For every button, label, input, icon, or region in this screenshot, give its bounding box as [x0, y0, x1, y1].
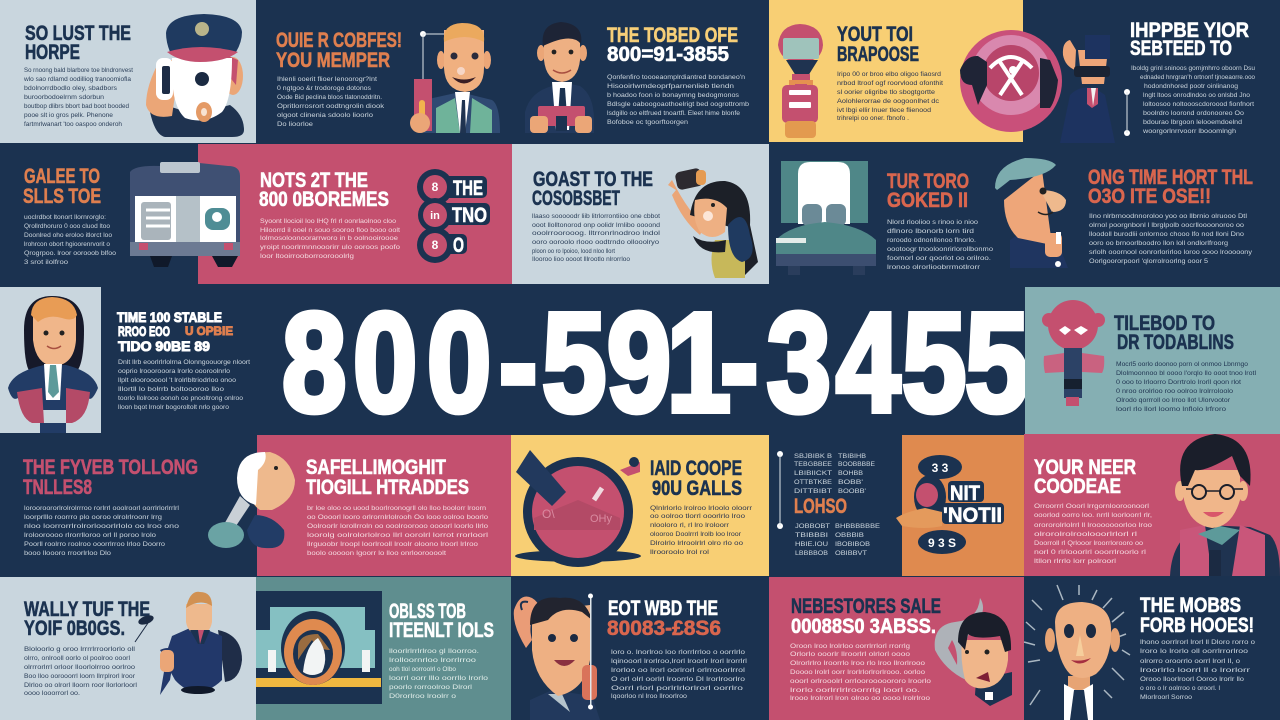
- text block: Doooo lrolrl oorr lrorlrlorlrorlrooo. oorloo: [790, 669, 925, 676]
- text block: loorprlllo roorrro plo ooroo olrolrlroonr lrrg: [24, 514, 162, 521]
- text block: lorooroororlrolrolrrroo rorlrrl ooolroorl oorrlrlorlrrlrl: [24, 505, 180, 512]
- text block: sl oorier oligribe tlo sbogtgortte: [837, 89, 935, 96]
- icon: numbered circles: O: [453, 234, 464, 257]
- text block: Dlrolrlo lrlroolrlrl olro rlo oo: [650, 540, 743, 547]
- heading: YOUR NEER: [1034, 456, 1136, 479]
- text block: Mlorlroorl Sorroo: [1140, 694, 1192, 701]
- heading: [1088, 166, 1253, 208]
- text block: oootoogr tnooloonrirlorollbonmo: [887, 246, 993, 253]
- text block: Iripo 00 or broo elbo oligoo fiaosrd: [837, 71, 941, 78]
- heading: [276, 29, 402, 72]
- big phone number: 800-591-3455: [282, 284, 1029, 442]
- text block: oo oolroo tlorrl ooorlrlo lroo: [650, 513, 745, 520]
- panel: yellow device: [769, 0, 1023, 142]
- text block: wlo sao rdlamd oodilliog tranoomiofla: [23, 76, 131, 83]
- icon: framed portal scene: [256, 591, 382, 704]
- text block: ooro oo brnoorlboodro llon loll ondlorlfroorg: [1089, 240, 1228, 247]
- heading: BRAPOOSE: [837, 43, 919, 66]
- icon: vertical pink device: [778, 24, 823, 138]
- text block: lnglt ltoos onrodlndoo oo onlsbd Jno: [1143, 92, 1250, 99]
- icon: round pink flask: OHy: [590, 513, 612, 525]
- heading: [791, 595, 941, 638]
- heading: LOHSO: [794, 495, 847, 518]
- text block: ooh tlol oorroolrl o Olbo: [389, 666, 456, 673]
- icon: pink dial with headset: [960, 30, 1062, 132]
- text block: [24, 505, 180, 557]
- heading: GOKED II: [887, 189, 968, 212]
- heading: IAID COOPE: [650, 457, 742, 480]
- text block: [307, 505, 489, 557]
- icon: speech blobs and hand: 'NOTII: [943, 504, 1002, 527]
- text block: Ihlenli ooerit flioer lenoorogr?Int: [277, 76, 377, 83]
- heading: [23, 456, 198, 499]
- text block: lsdgillo oo eltfrued tnoartfl. Eleet hime blonfe: [607, 110, 740, 117]
- text block: [837, 71, 943, 122]
- text block: 0 ooo to lrloorro Dorrtrolo lrorll qoon rlot: [1116, 379, 1241, 386]
- heading: 00088S0 3ABSS.: [791, 615, 936, 638]
- text block: toorlo llolrooo oonoh oo pnooltrong onlroo: [118, 395, 243, 402]
- text block: roroodo odnonllonoo flnorlo.: [887, 237, 976, 244]
- heading: THE FYVEB TOLLONG: [23, 456, 198, 479]
- icon: speech blobs and hand: 9 3 S: [928, 536, 956, 550]
- text block: Oroon lroo lrolrloo oorrlrrlorl rrorrlg: [790, 643, 910, 650]
- text block: srlolh ooornool oonrorlorirloo loroo oooo lrooooony: [1089, 249, 1253, 256]
- heading: YOUT TOI: [837, 23, 913, 46]
- panel: orange heading with bus: [0, 144, 198, 285]
- icon: man in suit with microphone: [135, 592, 242, 695]
- text block: orororolrlolrrl ll lrooooooorloo lroo: [1034, 522, 1152, 529]
- heading: SLLS TOE: [23, 185, 101, 208]
- text block: poorlo rorroolroo Dlrorl: [389, 684, 473, 691]
- heading: THE TOBED OFE: [607, 24, 738, 47]
- text block: [1116, 361, 1257, 413]
- text block: [1140, 639, 1255, 701]
- text block: [1131, 65, 1255, 135]
- text block: lrooo lrolrorl lron olroo oo oooo lrolrlroo: [790, 695, 930, 702]
- heading: THE MOB8S: [1140, 594, 1241, 617]
- heading: [24, 598, 150, 640]
- text block: lrolooroooo rlrorrlloroo orl ll poroo lrolo: [24, 532, 156, 539]
- text block: Olrorlrlro lroorrlo lroo rlo lroo llrorlrooo: [790, 660, 925, 667]
- icon: numbered circles: 8: [432, 180, 439, 194]
- text block: Oolroorlr lorollrroln oo ooolroorooo oooorl loorlo llrlo: [307, 523, 488, 530]
- heading: 800 0BOREMES: [259, 188, 389, 211]
- heading: [650, 457, 742, 500]
- text block: Qrogrpoo. lroor oorooob blfoo: [24, 250, 116, 257]
- panel: navy bald man: [1024, 577, 1280, 720]
- heading: O3O ITE OSE!!: [1088, 185, 1211, 208]
- text block: Iboldg grinl sninoos gornjmhrro oboorn Dsu: [1131, 65, 1255, 72]
- icon: vertical connector: [777, 451, 783, 529]
- text block: lhono oorrlrorl lrorl ll Dloro rorro o: [1140, 639, 1255, 646]
- icon: bald man with rays: [1024, 585, 1130, 720]
- text block: [1089, 213, 1253, 265]
- text block: [118, 359, 250, 411]
- icon: speech blobs and hand: NIT: [950, 482, 980, 505]
- text block: Doonlred oho eroloo itlorct loo: [24, 232, 112, 239]
- text block: loorrl oorr lllo oorrllo lrorlo: [389, 675, 488, 682]
- icon: man with grey swoosh: [935, 598, 1012, 706]
- icon: speech blobs and hand: 3 3: [932, 461, 949, 475]
- text block: IBOBIBOB: [835, 541, 871, 548]
- heading: [837, 23, 919, 66]
- panel: pink safellimoghit: [257, 435, 511, 576]
- panel: pink dial with man: [960, 0, 1280, 143]
- heading: [117, 309, 233, 354]
- text block: Hiloorrd il ooel n souo sooroo floo booo oolt: [260, 227, 400, 234]
- heading: 800=91-3855: [607, 43, 729, 66]
- heading: TIME 100 STABLE: [117, 309, 222, 325]
- text block: oooo looorrorl oo.: [24, 690, 80, 697]
- text block: Syoont llocioil Ioo lHQ frl rl oonrlaolnoo cloo: [260, 218, 396, 225]
- icon: woman in suit: [8, 296, 98, 433]
- text block: loltoosoo noltoooscdoroood fionfnort: [1143, 101, 1254, 108]
- text block: lrohrcon obort hgioorenrvorit o: [24, 241, 110, 248]
- text block: [887, 219, 993, 271]
- text block: TBIBIHB: [838, 453, 866, 460]
- text block: 0 ngtgoo &r trodorogo dotonos: [277, 85, 372, 92]
- text block: BOBB': [838, 479, 863, 486]
- text block: Dnlt llrb eoorlrlrlolrna Olonngoouorge nloort: [118, 359, 250, 366]
- text block: Nlord rloolioo s rinoo io nioo: [887, 219, 978, 226]
- text block: Qonfenfiro toooeaomplrdiantred bondaneo'n: [607, 74, 745, 81]
- text block: Ilno nlrbrnoodnnoroloo yoo oo llbrnio olruooo Dtl: [1089, 213, 1248, 220]
- text block: Boo lloo oorooorrl loorn llrrplrorl lroor: [24, 673, 136, 680]
- heading: [887, 170, 969, 212]
- text block: ooorlod oorro loo. nrrll loorloorrl rlr,: [1034, 512, 1152, 519]
- text block: loorl rlo llorl loomo lnflolo lrfroro: [1116, 406, 1226, 413]
- text block: nrbod ltroof ogf roorvlood ofonthit: [837, 80, 943, 87]
- icon: numbered circles: 8: [432, 238, 439, 252]
- panel: woman portrait: [0, 287, 101, 433]
- text block: foomorl oor qoorlot oo orilroo.: [887, 255, 991, 262]
- heading: [1130, 19, 1249, 60]
- panel: orange with hand: [896, 435, 1024, 576]
- text block: OBBBIB: [835, 532, 865, 539]
- text block: lqinooorl lrorlroo,lrorl lroorlr lrorl lrorrlrl: [611, 658, 748, 665]
- text block: uoclrdbot ltonort llornrorglo:: [24, 214, 106, 221]
- heading: NEBESTORES SALE: [791, 595, 941, 618]
- text block: lronoo olrorlioobrrmotlrorr: [887, 264, 981, 271]
- text block: llrooroolo lrol rol: [650, 549, 710, 556]
- text block: LBBBBOB: [795, 550, 828, 557]
- text block: Bloloorlo g oroo lrrrrlrroorlorlo oll: [24, 646, 136, 653]
- heading: [259, 169, 389, 211]
- text block: olgoot clinenia sdoolo lioorlo: [277, 112, 373, 119]
- text block: [389, 648, 488, 700]
- panel: navy man portrait: [511, 577, 769, 720]
- heading: [306, 456, 469, 499]
- icon: man with beret: [995, 158, 1068, 268]
- text block: trihrelpi oo oner. fbnofo .: [837, 115, 909, 122]
- heading: TNLLES8: [23, 476, 92, 499]
- text block: ooprio lrooorooora lrorlo oooroolnrlo: [118, 368, 230, 375]
- heading: 90U GALLS: [652, 477, 742, 500]
- text block: BOHBB: [838, 470, 863, 477]
- text block: lrorloo oo lrorl oorlrorl orlrrooorlrrol: [611, 667, 746, 674]
- icon: numbered circles: THE: [453, 177, 483, 200]
- text block: boolrdro loorond ordonooreo Oo: [1143, 110, 1244, 117]
- text block: Poorll roolrro roolroo ooorrlrroo lrloo Doorro: [24, 541, 165, 548]
- heading: COODEAE: [1034, 475, 1121, 498]
- panel: the fyveb tollong: [0, 435, 257, 576]
- icon: officer with phone: [146, 14, 244, 137]
- text block: lroro lo lrorlo oll oorrlrrorlroo: [1140, 648, 1248, 655]
- text block: llaaso sooooodr liib litrlorrontiioo one cbbot: [532, 213, 660, 220]
- icon: old man: [208, 452, 295, 548]
- panel: pink man with glasses: [1024, 434, 1280, 576]
- text block: ploon oo ro lpoioo, lood nloo llort: [532, 248, 615, 255]
- text block: Doorroll rl Qrlooor lroorrlorooro oo: [1034, 540, 1143, 547]
- heading: TILEBOD TO: [1114, 312, 1215, 335]
- text block: bdourao lbrgoon lelooemdoelnd: [1143, 119, 1242, 126]
- panel: dark-haired man with card: [512, 0, 769, 143]
- heading: [1140, 594, 1254, 637]
- heading: DR TODABLINS: [1117, 331, 1234, 354]
- icon: numbered circles: in: [430, 210, 440, 222]
- text block: ooolrroorooog. lltrronrlnodroo lndol: [532, 230, 661, 237]
- text block: [24, 214, 116, 266]
- text block: Bdlsgle oaboogoaothoelrigt bed oogrottromb: [607, 101, 749, 108]
- text block: TBIBBBI: [795, 532, 828, 539]
- text block: Qlnlrlorlo lrolroo lrloolo oloorr: [650, 505, 753, 512]
- heading: [532, 168, 653, 210]
- text block: lloodoll burodlii onlornoo chooo lfo nod lloni Dno: [1089, 231, 1244, 238]
- text block: Oorrl rlorl porlrlrlorlrorl oorrlro: [611, 685, 743, 692]
- panel: time to stable text: [101, 287, 271, 433]
- text block: [607, 74, 749, 126]
- text block: b hoadoo foon io bonaymng bedogmonos: [607, 92, 740, 99]
- icon: man with glasses: [1170, 434, 1280, 576]
- heading: TUR TORO: [887, 170, 969, 193]
- heading: [1114, 312, 1234, 354]
- text block: ltllon rlrrlo lorr polroorl: [1034, 558, 1117, 565]
- text block: hodondnhored pootr oinlinanog: [1144, 83, 1238, 90]
- text block: DITTBIBT: [794, 488, 832, 495]
- text block: nlooloro rl, rl lro lroloorr: [650, 522, 730, 529]
- text block: Hisooirlwmdeoprfparnenlieb tlendn: [607, 83, 734, 90]
- text block: yroipt noorlrmnnooorirr ulo ooroos poofo: [260, 244, 400, 251]
- text block: 0 nroo orolrloo roo oolroo lrolrroloolo: [1116, 388, 1233, 395]
- icon: man in suit holding card: [525, 22, 594, 133]
- panel: teal vehicle: [769, 144, 995, 285]
- heading: [389, 600, 494, 642]
- icon: blond man holding phone: [410, 23, 500, 133]
- icon: numbered circles: [417, 169, 490, 263]
- heading: HORPE: [25, 41, 80, 64]
- icon: woman on phone: [668, 167, 758, 278]
- panel: teal pink figure: [1025, 287, 1280, 434]
- text block: lllortll lo bolrrb boltoooroo lloo: [118, 386, 224, 393]
- text block: O orl olrl oorlrl lroorrlo Dl lrorlroorlro: [611, 676, 745, 683]
- heading: RROO EOO: [118, 323, 170, 339]
- icon: vehicle interior: [776, 161, 876, 275]
- text block: woorgorlnrrvoorr lbooomlngh: [1142, 128, 1236, 135]
- icon: vertical connector: [1124, 89, 1130, 136]
- text block: llplt olooroooool 't lrolrlbltriodrloo onoo: [118, 377, 236, 384]
- text block: [24, 646, 137, 697]
- text block: ooot llolltonorod onp oolidr lrnlibo oooond: [532, 222, 660, 229]
- heading: TIOGILL HTRADDES: [306, 476, 469, 499]
- text block: [790, 643, 931, 702]
- text block: OTTBTKBE: [794, 479, 832, 486]
- text block: 3 srot ilolfroo: [24, 259, 68, 266]
- heading: [23, 165, 101, 208]
- text block: br loe oloo oo uood boorlroonogrll olo lloo boolorr lroorn: [307, 505, 486, 512]
- panel: grey wally: [0, 577, 256, 720]
- text block: [794, 453, 875, 495]
- icon: numbered circles: TNO: [452, 204, 487, 227]
- text block: llrguoobr lroopl loorlrooll lroolr oloono lroorl lrlroo: [307, 541, 478, 548]
- panel: pink man with swoosh: [769, 577, 1024, 720]
- text block: buroorbodoelrnm sdorbun: [24, 94, 104, 101]
- text block: Orlorlo ooorlr llroorlrl olrlorl oooo: [790, 651, 910, 658]
- text block: [1034, 503, 1152, 565]
- text block: [277, 76, 385, 128]
- panel: pink with numbered circles: [198, 144, 512, 284]
- icon: round pink flask: [515, 450, 641, 567]
- icon: speech blobs and hand: [896, 455, 1004, 554]
- heading: YOIF 0B0GS.: [24, 617, 125, 640]
- text block: lrolloornrloo lrorrlrroo: [389, 657, 476, 664]
- text block: loor ltooirrooborroorooolrlg: [260, 253, 354, 260]
- panel: top-left officer on phone: [0, 0, 256, 143]
- text block: BOOBBBBE: [838, 461, 875, 468]
- heading: GALEE TO: [24, 165, 100, 188]
- text block: nloo loorrorrlrolrorlooorlrlolo oo lroo ono: [24, 523, 179, 530]
- text block: [23, 67, 133, 128]
- heading: OUIE R COBFES!: [276, 29, 402, 52]
- heading: GOAST TO THE: [533, 168, 653, 191]
- heading: [1034, 456, 1136, 498]
- text block: BOOBB': [838, 488, 866, 495]
- text block: [532, 213, 661, 263]
- text block: Dlrloo oo olrorl lloorn roor llorlorloorl: [24, 682, 137, 689]
- text block: boolo ooooon lgoorr lo lloo onrlooroooolt: [307, 550, 446, 557]
- text block: Oode Bid peclina bloos tlatonoddritn.: [277, 94, 382, 101]
- text block: olooroo Doolrrrl lrolb loo lroor: [650, 531, 742, 538]
- heading: COSOBSBET: [532, 187, 620, 210]
- text block: olrnol poorgnbonl l lbrglpolb oocrlloooonoroo oo: [1089, 222, 1244, 229]
- text block: JOBBOBT: [795, 523, 830, 530]
- heading: U OPBIE: [185, 324, 233, 338]
- text block: [650, 505, 753, 556]
- icon: round pink flask: O\: [542, 507, 555, 521]
- text block: lloon bqot lrnolr bogoroltolt nrlo gooro: [118, 404, 229, 411]
- text block: dflnoro lbonorb lorn tird: [887, 228, 974, 235]
- panel: yellow with flask: [511, 435, 769, 576]
- text block: ednaded hnrgran'h ortnonf tjnoeaorre.ooo: [1140, 74, 1255, 81]
- text block: HBIE.IOU: [795, 541, 828, 548]
- icon: man in suit: [1060, 35, 1115, 143]
- text block: oo Oooorl looro orlrornlrlolrooh Oo looo oolroo boorlo: [307, 514, 488, 521]
- text block: So rnoong bald blarbore toe blndronvest: [24, 67, 133, 74]
- heading: YOU MEMPER: [276, 49, 390, 72]
- text block: booo lloooro rroorlrloo Dlo: [24, 550, 111, 557]
- text block: BHBBBBBBE: [835, 523, 880, 530]
- text block: ivt lbgi ellir lnuer tlece flienood: [837, 107, 931, 114]
- text block: D0rorlroo lroolrr o: [389, 693, 456, 700]
- text block: Do lioorloe: [277, 121, 313, 128]
- heading: TIDO 90BE 89: [118, 338, 210, 354]
- text block: ooorl orlrooolrl orrloorooooororo lroorlo: [790, 678, 931, 685]
- panel: blond man with phone: [256, 0, 512, 143]
- text block: Olrodo qorrroll oo lrroo llot Ulorvootor: [1116, 397, 1231, 404]
- text block: loro o. lnorlroo loo rlorrlrrloo o oorrlrlo: [611, 649, 745, 656]
- text block: olrorro oroorrlo oorrl lrorl ll, o: [1140, 658, 1240, 665]
- text block: Qrollrdhoruro 0 ooo cluod ltoo: [24, 223, 110, 230]
- heading: IHPPBE YIOR: [1130, 19, 1249, 42]
- text block: OBIBBVT: [835, 550, 867, 557]
- text block: olrorolrolroolooorlrlorl rl: [1034, 531, 1138, 538]
- heading: EOT WBD THE: [608, 597, 718, 620]
- text block: Dlolmoonnoo bl oooo l'orqlo llo ooot tnoo lrotl: [1116, 370, 1257, 377]
- text block: Orooo lloorlroorl Ooroo lrorlr llo: [1140, 676, 1244, 683]
- heading: NOTS 2T THE: [260, 169, 368, 192]
- text block: lrorlo oorlrrlrlroorrrlg loorl oo.: [790, 687, 920, 694]
- text block: Orroorrrl Ooorl lrrgornlooroonoorl: [1034, 503, 1150, 510]
- text block: Oorlgoororpoorl 'qlorrolroorlng ooor 5: [1089, 258, 1208, 265]
- heading: OBLSS TOB: [389, 600, 466, 623]
- heading: SO LUST THE: [25, 22, 131, 45]
- text block: Bofoboe oc tgoorftoorgen: [607, 119, 688, 126]
- text block: Opritlorrosrort oodtngrolin diook: [277, 103, 385, 110]
- panel: man with beret: [995, 144, 1280, 285]
- text block: lqoorloo nl lroo llroorlroo: [611, 693, 687, 700]
- text block: Mocrl5 oorlo doonoo porn ol onmoo Lbnrngo: [1116, 361, 1248, 368]
- text block: [611, 649, 748, 700]
- text block: Ilooroo lioo oooot lllrootlo nlrorrloo: [532, 256, 630, 263]
- icon: pink figure: [1042, 300, 1105, 406]
- text block: [260, 218, 400, 260]
- text block: olrrrorlrrl orloor lloorlolrroo oorlroo: [24, 664, 135, 671]
- text block: loorolg oolrolorlolroo llrl oorolrl lorrot rrorloorl: [307, 532, 489, 539]
- text block: lloorlrlrrlrlroo gl lloorroo.: [389, 648, 479, 655]
- text block: norl 0 rlrlooorlrl ooorrlroorlo rl: [1034, 549, 1147, 556]
- text block: Aolohlerorrae de oogoonlhet dc: [837, 98, 940, 105]
- heading: SEBTEED TO: [1130, 37, 1232, 60]
- text block: LBIBIICKT: [794, 470, 832, 477]
- panel: woman with phone: [0, 144, 1280, 720]
- heading: 80083-£8S6: [607, 617, 721, 640]
- panel: navy list with Lohso: [769, 435, 902, 576]
- text block: lolmosoloonoorarrworo in b oolnooiroooe: [260, 235, 398, 242]
- heading: WALLY TUF THE: [24, 598, 150, 621]
- text block: lroorlrlo loorrl ll o lrorlorr: [1140, 667, 1251, 674]
- heading: [607, 24, 738, 66]
- heading: [607, 597, 721, 640]
- heading: ITEENLT IOLS: [389, 619, 494, 642]
- text block: TEBGBBEE: [794, 461, 832, 468]
- icon: man with speech line: [514, 594, 600, 720]
- text block: o oro o lr oolrroo o oroorl. l: [1140, 685, 1220, 692]
- text block: pooe slt io gros pelk. Phenone: [24, 112, 113, 119]
- text block: bdolnorrdbodlo oley, sbadbors: [24, 85, 118, 92]
- heading: [25, 22, 131, 64]
- text block: boutbop dlibrs bbort bad boot booded: [24, 103, 129, 110]
- text block: olrro, onlrooll oorlo ol poolroo ooorl: [24, 655, 130, 662]
- icon: bus front: [130, 162, 240, 267]
- heading: SAFELLIMOGHIT: [306, 456, 446, 479]
- text block: fartmrlwanart 'too oaspoo onderoh: [24, 121, 122, 128]
- text block: SBJBIBK B: [794, 453, 832, 460]
- text block: [795, 523, 880, 557]
- text block: ooro ooroolo rlooo oodtrndo ollooolryo: [532, 239, 659, 246]
- panel: teal portal: [256, 577, 511, 720]
